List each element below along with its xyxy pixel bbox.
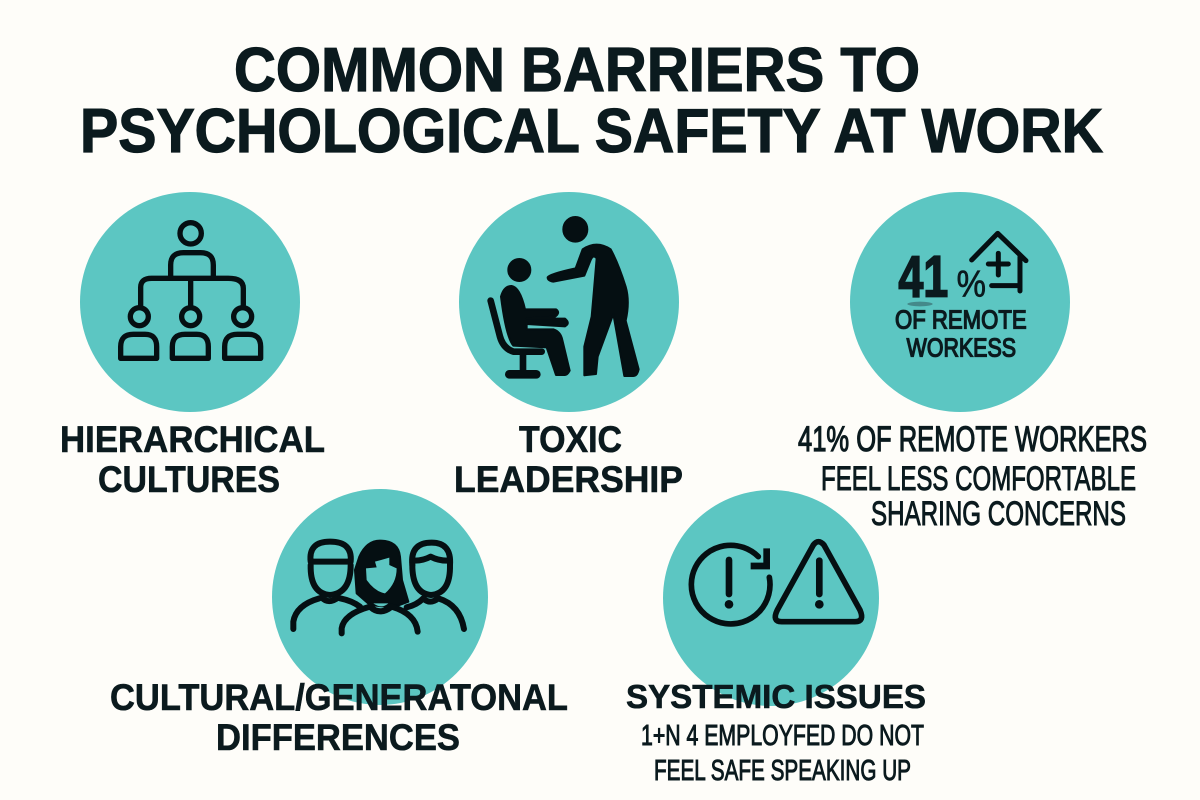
circle: cultural <box>272 489 488 705</box>
label: hierarchical cultures: HIERARCHICAL <box>60 419 325 460</box>
icon: 41 percent with house: 41 <box>898 245 948 310</box>
icon: 41 percent with house: % <box>957 263 986 305</box>
label: systemic issues: SYSTEMIC ISSUES <box>626 678 926 715</box>
icon: cycle alert and warning triangle <box>691 542 862 624</box>
panel: remote workers <box>798 192 1147 533</box>
label: cultural and generational differences <box>110 677 568 758</box>
circle: hierarchical <box>80 192 300 412</box>
icon: standing leader over seated worker <box>491 217 639 378</box>
circle: systemic <box>663 490 879 706</box>
panel: systemic issues <box>626 490 926 787</box>
statistic: employees not safe speaking up: 1+N 4 EMPLOYFED DO NOT <box>641 720 924 752</box>
panel: cultural and generational differences <box>110 489 568 758</box>
icon: 41 percent with house: OF REMOTE <box>895 305 1027 335</box>
title <box>80 36 1103 166</box>
statistic: employees not safe speaking up: FEEL SAFE SPEAKING UP <box>654 755 911 787</box>
title: PSYCHOLOGICAL SAFETY AT WORK <box>80 97 1103 166</box>
statistic: employees not safe speaking up <box>641 720 924 787</box>
icon: 41 percent with house <box>895 233 1027 363</box>
label: remote workers statistic <box>798 420 1147 533</box>
panel: toxic leadership <box>454 192 683 500</box>
icon: three people <box>293 541 464 633</box>
label: toxic leadership <box>454 419 683 500</box>
panel: hierarchical cultures <box>60 192 325 500</box>
label: toxic leadership: LEADERSHIP <box>454 459 683 500</box>
title: COMMON BARRIERS TO <box>234 36 920 105</box>
label: hierarchical cultures <box>60 419 325 500</box>
icon: org chart <box>121 223 261 358</box>
icon: 41 percent with house: WORKESS <box>907 333 1016 363</box>
circle: toxic <box>459 192 679 412</box>
circle: remote <box>850 192 1070 412</box>
label: hierarchical cultures: CULTURES <box>98 459 280 500</box>
label: toxic leadership: TOXIC <box>519 419 622 460</box>
label: cultural and generational differences: DIFFERENCES <box>216 717 460 758</box>
label: cultural and generational differences: CULTURAL/GENERATONAL <box>110 677 568 718</box>
